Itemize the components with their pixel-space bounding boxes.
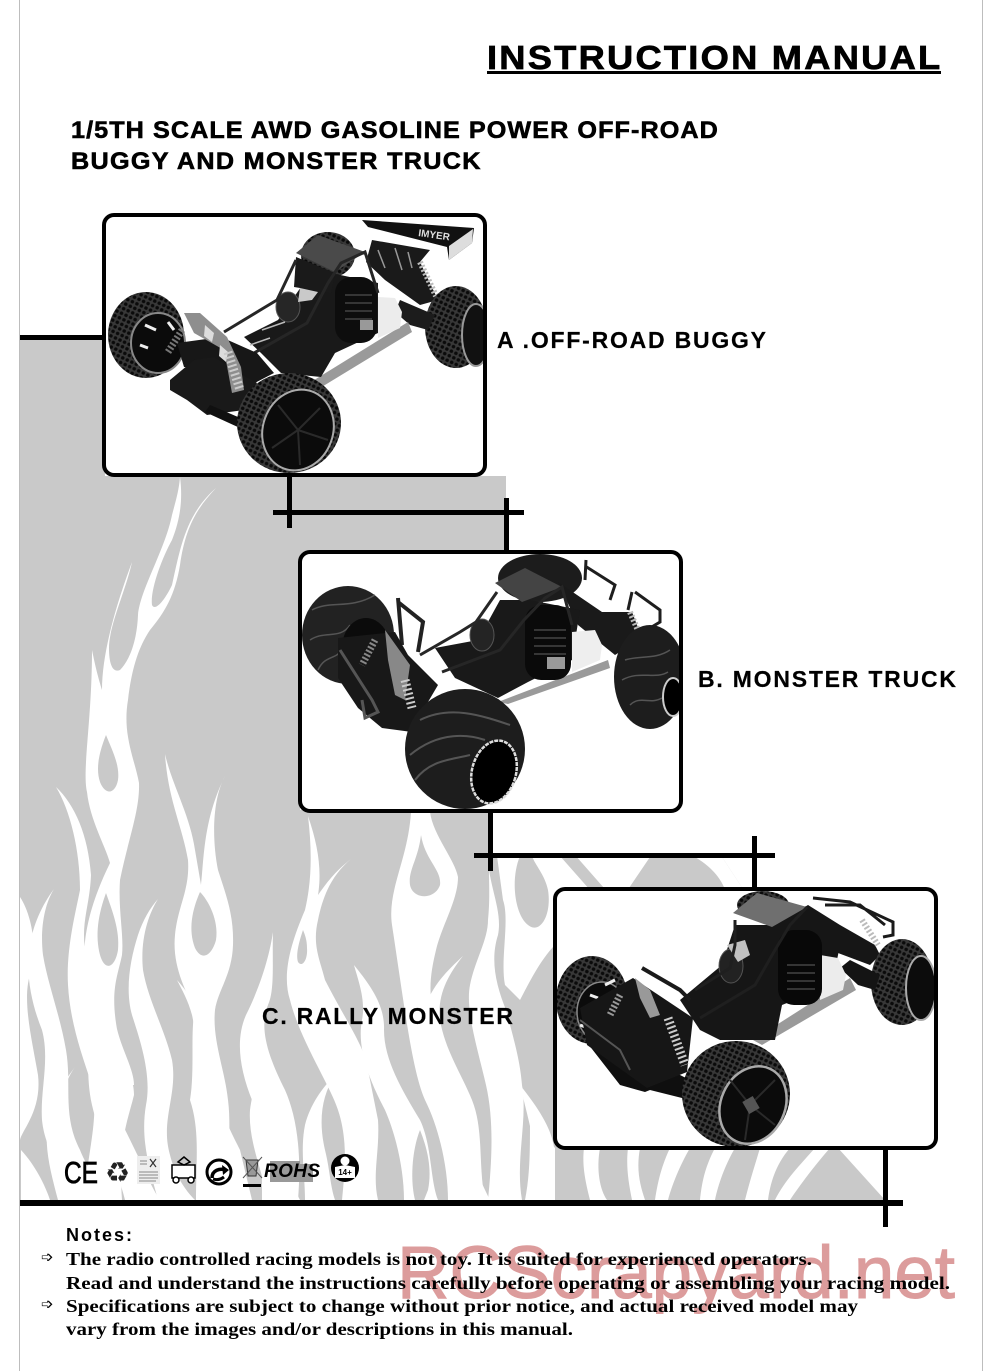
icon: crossed bin: [243, 1157, 262, 1187]
icon: cart: [172, 1157, 195, 1183]
subtitle: 1/5TH SCALE AWD GASOLINE POWER OFF-ROAD: [71, 118, 718, 144]
notes heading: Notes:: [66, 1225, 132, 1245]
panel: off-road buggy photo: [104, 215, 490, 480]
watermark: RCScrapyard.net: [397, 1231, 955, 1314]
notes text: [41, 1248, 950, 1339]
title: INSTRUCTION MANUAL: [487, 40, 940, 77]
panel: off-road buggy photo: IMYER: [418, 228, 451, 243]
icon: 14+ age: [331, 1154, 359, 1182]
notes text: ➩: [41, 1295, 54, 1313]
grey background with white flames: [20, 340, 885, 1200]
icon: 14+ age: 14+: [338, 1168, 352, 1177]
certification icons: [64, 1154, 359, 1190]
notes text: Read and understand the instructions carefully before operating or assembling your racing model.: [66, 1273, 950, 1293]
icon: label sticker: [137, 1156, 160, 1184]
icon: ROHS: ROHS: [264, 1161, 320, 1182]
panel: monster truck photo: [300, 552, 686, 811]
icon: recycle: ♻: [105, 1156, 130, 1189]
notes text: Specifications are subject to change without prior notice, and actual received model may: [66, 1296, 858, 1316]
notes text: ➩: [41, 1248, 54, 1266]
label A: A .OFF-ROAD BUGGY: [497, 327, 766, 353]
notes text: vary from the images and/or descriptions in this manual.: [66, 1319, 573, 1339]
panel: rally monster photo: [555, 889, 936, 1155]
icon: green dot: [207, 1160, 231, 1184]
icon: CE mark: CE: [64, 1155, 98, 1190]
subtitle: [71, 118, 718, 175]
label C: C. RALLY MONSTER: [262, 1003, 513, 1029]
subtitle: BUGGY AND MONSTER TRUCK: [71, 149, 481, 175]
notes text: The radio controlled racing models is not toy. It is suited for experienced operators.: [66, 1249, 812, 1269]
label B: B. MONSTER TRUCK: [698, 666, 956, 692]
connector lines: [20, 335, 903, 1227]
